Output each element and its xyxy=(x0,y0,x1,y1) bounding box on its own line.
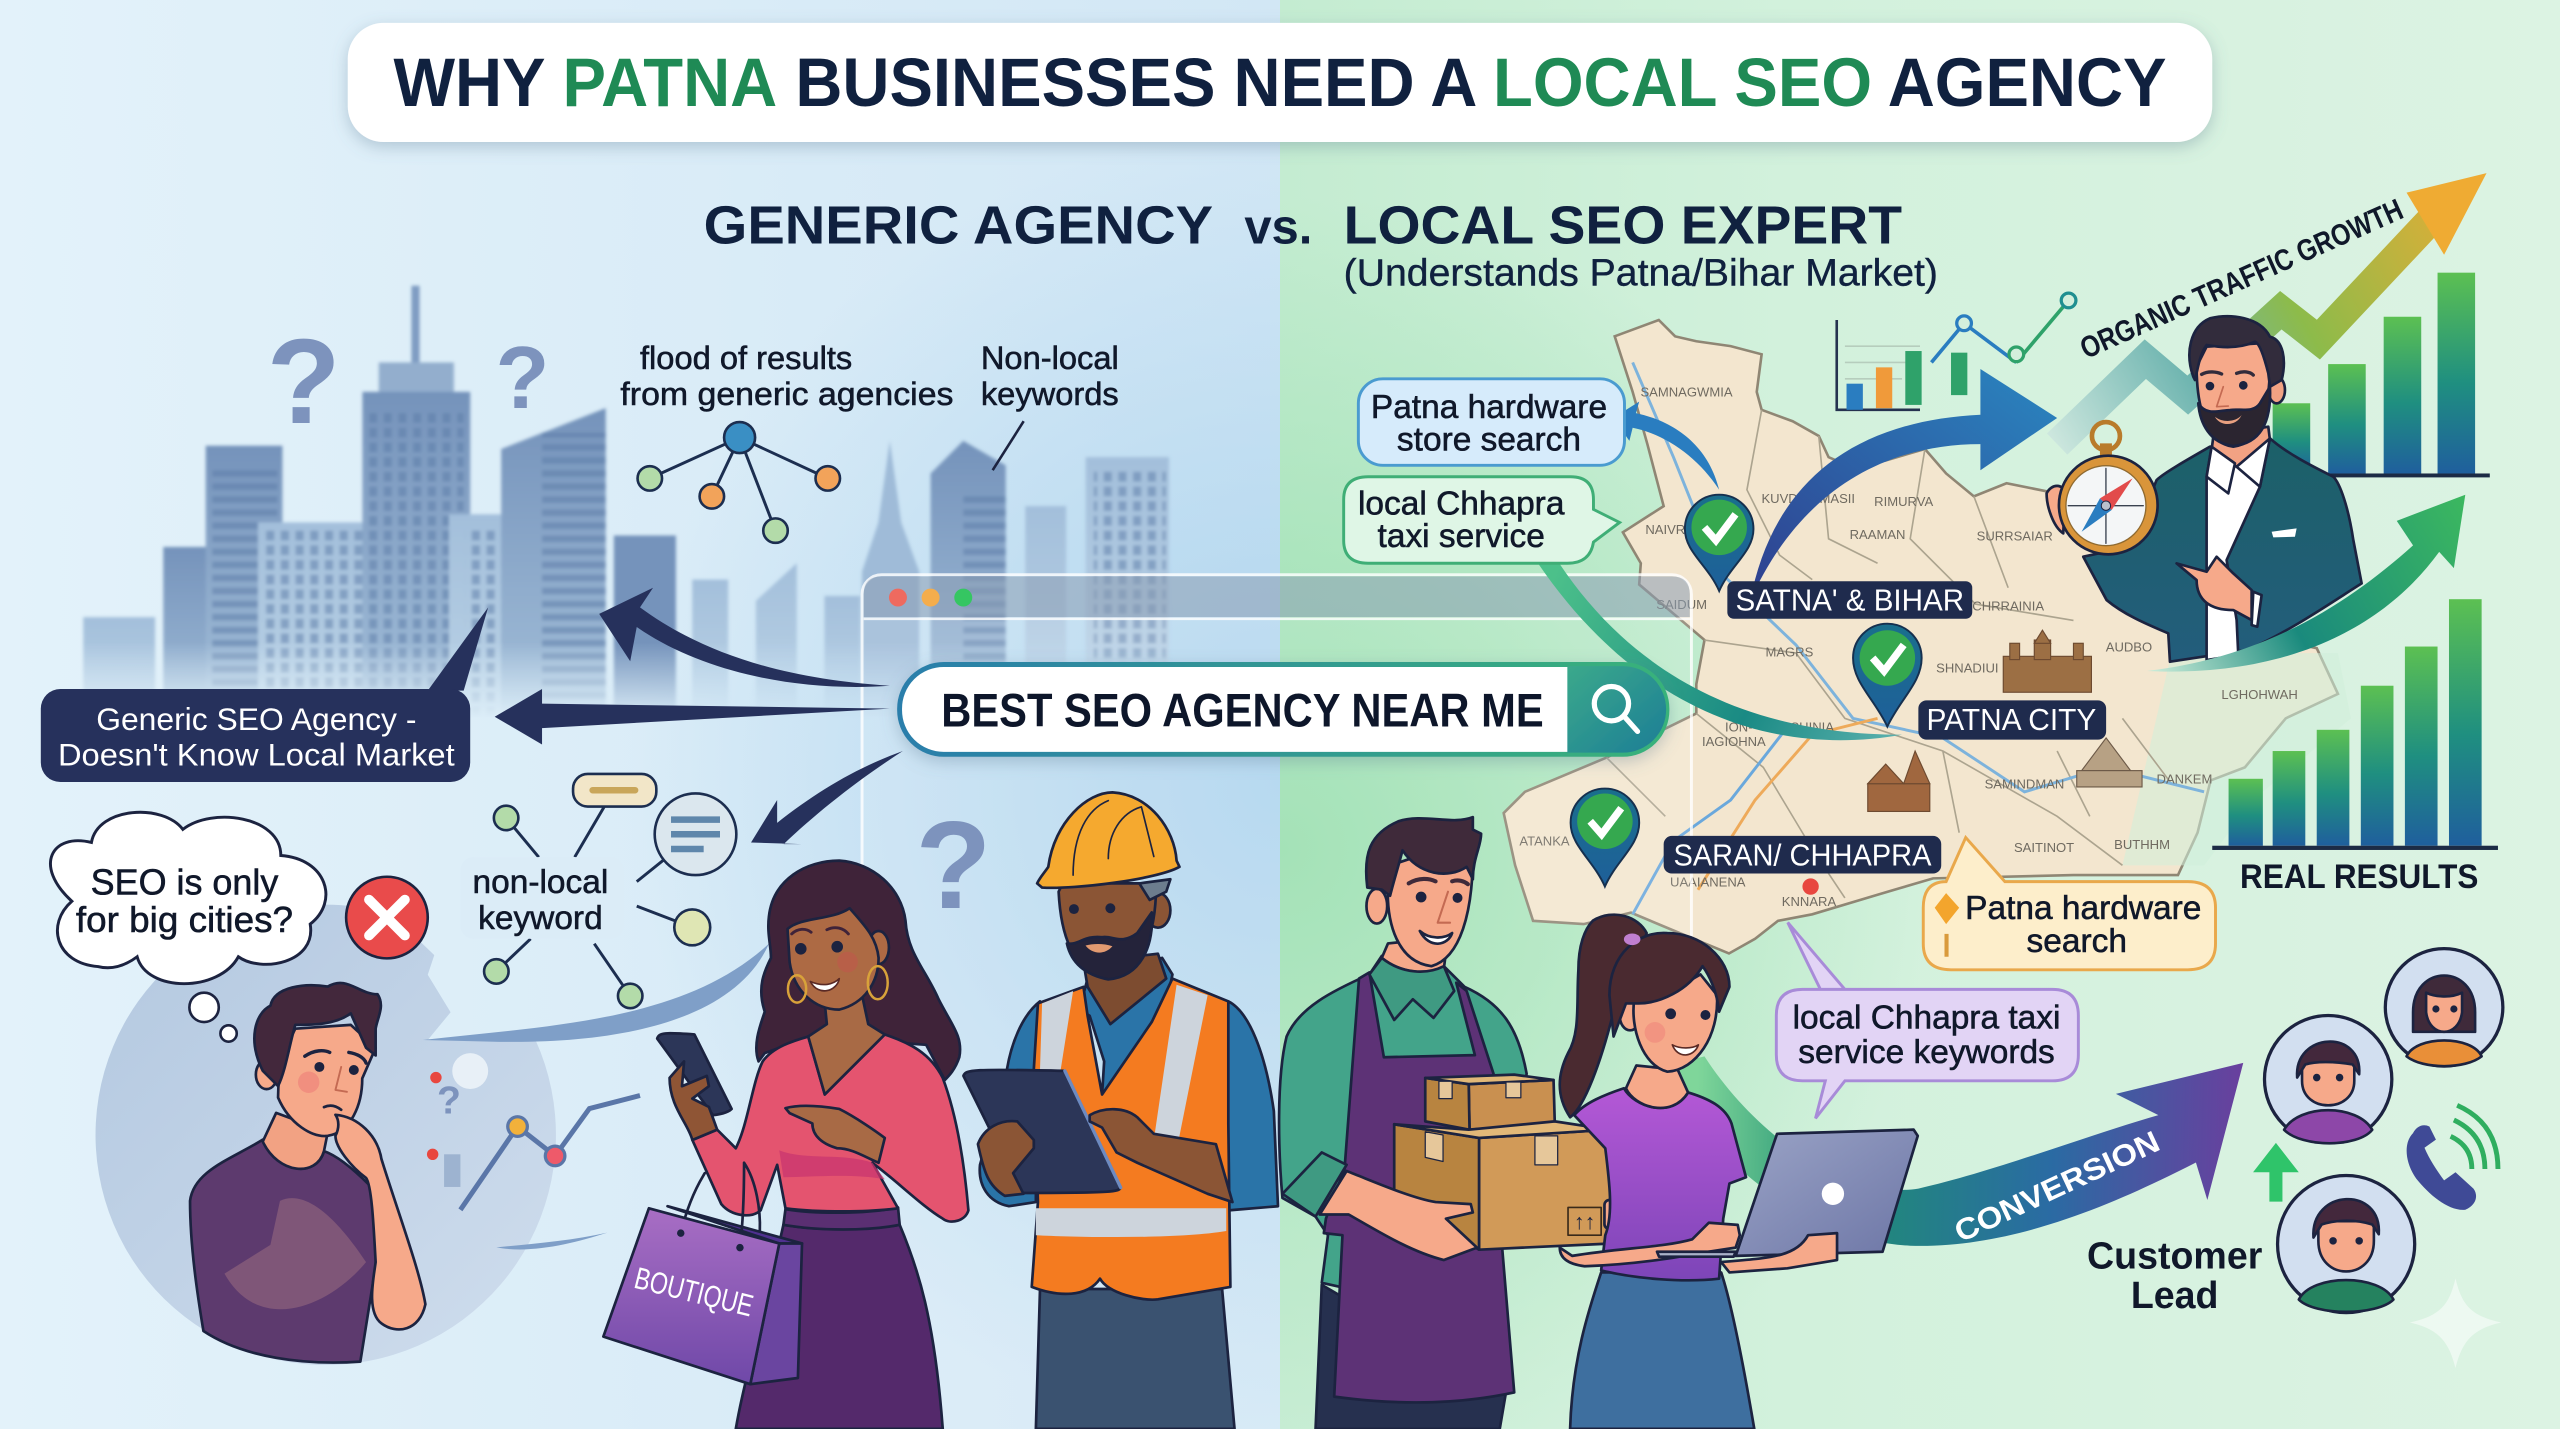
browser window xyxy=(862,575,1691,1429)
conversion arrow: CONVERSION xyxy=(1950,1125,2165,1249)
callout: generic SEO agency: Doesn't Know Local Market xyxy=(58,737,455,773)
background: left blue half xyxy=(0,0,1280,1429)
callout: Patna hardware search xyxy=(1923,838,2216,970)
callout: Patna hardware search: search xyxy=(2027,923,2127,960)
heading: vs: vs. xyxy=(1244,200,1312,254)
map place labels: ION- xyxy=(1725,719,1753,734)
map place labels: UAAIANENA xyxy=(1670,875,1746,890)
rivers and roads xyxy=(1633,362,2204,792)
question mark in browser: ? xyxy=(916,797,991,935)
map place labels: KUVD xyxy=(1761,491,1798,506)
text: flood of results: flood of results xyxy=(640,339,852,376)
callout: local Chhapra taxi service keywords xyxy=(1776,922,2078,1118)
character: woman with phone and bag: BOUTIQUE xyxy=(631,1261,757,1323)
map place labels: RIMURVA xyxy=(1874,494,1933,509)
map place labels: SHINIA xyxy=(1790,719,1834,734)
map place labels: BUTHHM xyxy=(2114,837,2170,852)
map place labels: RAAMAN xyxy=(1850,527,1905,542)
heading: generic agency: GENERIC AGENCY xyxy=(704,195,1213,255)
callout: Patna hardware store search xyxy=(1358,379,1624,465)
map pin: Satna xyxy=(1685,495,1753,591)
arrow: dark arrow to keyword node xyxy=(751,751,903,844)
thought cloud xyxy=(50,812,326,1042)
question mark left: ? xyxy=(267,314,341,449)
big blue arrow to growth chart xyxy=(1750,369,2057,601)
landmark: temple xyxy=(1868,751,1930,811)
label: customer lead: Customer xyxy=(2087,1235,2263,1277)
network diagram: generic agencies xyxy=(638,422,840,543)
small swoosh xyxy=(496,1233,607,1249)
text: non-local keywords: keywords xyxy=(981,375,1119,412)
callout: local Chhapra taxi service xyxy=(1344,477,1620,563)
icon: magnifier xyxy=(1594,687,1638,731)
map place labels: CHRRAINIA xyxy=(1972,599,2044,614)
text: flood of results: from generic agencies xyxy=(620,375,953,412)
label: customer lead xyxy=(2087,1235,2263,1316)
question mark right: ? xyxy=(496,328,549,427)
label: Patna City: PATNA CITY xyxy=(1927,704,2096,737)
subheading: understands market: (Understands Patna/Bihar Market) xyxy=(1344,252,1938,294)
search button xyxy=(1567,666,1666,753)
icon: phone with signal xyxy=(2407,1105,2498,1210)
character: woman with laptop xyxy=(1560,915,1918,1429)
blue arrow to callout xyxy=(1613,402,1719,490)
pointer line xyxy=(993,421,1024,470)
title bar: WHY PATNA BUSINESSES NEED A LOCAL SEO AGENCY xyxy=(393,44,2167,121)
icon: green up arrow xyxy=(2253,1143,2299,1202)
map place labels: AUDBO xyxy=(2106,639,2152,654)
map place labels: JASMASII xyxy=(1796,491,1855,506)
network diagram: non-local keyword: keyword xyxy=(478,900,603,937)
map place labels: KNNARA xyxy=(1782,894,1836,909)
map place labels: SAMNAGWMIA xyxy=(1640,385,1733,400)
district borders xyxy=(1607,410,2171,898)
growth bar chart top xyxy=(2273,273,2490,477)
character: local SEO expert with compass xyxy=(2047,316,2362,662)
declining line chart xyxy=(427,1053,640,1210)
map place labels: IAGIOHNA xyxy=(1702,734,1766,749)
red city marker xyxy=(1802,878,1819,895)
character: shopkeeper with boxes xyxy=(1279,817,1616,1429)
network diagram: non-local keyword xyxy=(460,774,736,1008)
thought cloud: SEO is only xyxy=(91,862,278,903)
blurred city skyline xyxy=(83,286,1169,731)
map place labels: SAIDUM xyxy=(1656,597,1707,612)
label: Saran/Chhapra: SARAN/ CHHAPRA xyxy=(1673,839,1932,872)
text: non-local keywords xyxy=(981,339,1119,412)
green growth arrow xyxy=(2147,495,2465,672)
callout: local Chhapra taxi service: local Chhapra xyxy=(1358,485,1565,522)
swoosh toward worried man xyxy=(423,944,769,1042)
character: woman with phone and bag xyxy=(603,861,968,1429)
search bar xyxy=(900,664,1667,754)
callout: local Chhapra taxi service keywords: service keywords xyxy=(1798,1034,2055,1071)
map of Bihar xyxy=(1504,320,2351,953)
organic traffic zig-zag arrow xyxy=(2057,173,2487,444)
conversion arrow xyxy=(1649,1056,2243,1249)
label: organic traffic growth: ORGANIC TRAFFIC GROWTH xyxy=(2075,193,2408,366)
callout: local Chhapra taxi service keywords: local Chhapra taxi xyxy=(1793,1000,2060,1037)
text: non-local keywords: Non-local xyxy=(981,339,1119,376)
map place labels: LGHOHWAH xyxy=(2221,687,2298,702)
character: construction worker xyxy=(963,792,1278,1429)
green swoosh from callout to Patna xyxy=(1538,563,1902,740)
map pin: Patna xyxy=(1853,624,1922,727)
background: right green half xyxy=(1280,0,2560,1429)
customer avatar: bottom man xyxy=(2278,1176,2415,1313)
arrow: dark arrow to skyline xyxy=(599,588,890,687)
map place labels: ATANKA xyxy=(1519,834,1570,849)
title bar xyxy=(348,23,2212,142)
map place labels: NAIVR xyxy=(1645,522,1685,537)
map place labels: SAMINDMAN xyxy=(1985,777,2064,792)
heading: local SEO expert: LOCAL SEO EXPERT xyxy=(1344,195,1902,255)
character: shopkeeper with boxes: ↑↑ xyxy=(1574,1210,1595,1234)
small bar and line chart xyxy=(1837,293,2076,410)
compass xyxy=(2047,422,2158,554)
map place labels: MAGRS xyxy=(1765,644,1814,659)
callout: generic SEO agency xyxy=(41,607,488,782)
map place labels: SURRSAIAR xyxy=(1977,528,2053,543)
callout: Patna hardware store search: Patna hardware xyxy=(1371,389,1607,426)
icon: red X xyxy=(346,877,428,958)
callout: Patna hardware store search: store search xyxy=(1397,422,1581,459)
landmark: palace xyxy=(2003,630,2091,692)
arrow: dark arrow to generic agency xyxy=(495,689,890,744)
label: Satna and Bihar: SATNA' & BIHAR xyxy=(1736,585,1964,618)
customer avatar: top right woman xyxy=(2385,949,2503,1066)
fading eastern map region xyxy=(2122,653,2351,865)
landmark: stupa xyxy=(2077,738,2142,787)
character: worried man xyxy=(190,983,425,1363)
map place labels: SAITINOT xyxy=(2014,840,2074,855)
label: real results: REAL RESULTS xyxy=(2240,858,2478,896)
declining line chart: ? xyxy=(437,1079,461,1122)
text: flood of results xyxy=(620,339,953,412)
search bar: BEST SEO AGENCY NEAR ME xyxy=(941,685,1544,738)
network diagram: non-local keyword: non-local xyxy=(473,864,608,901)
customer avatar: middle man xyxy=(2264,1016,2392,1143)
map place labels: DANKEM xyxy=(2157,772,2212,787)
callout: Patna hardware search: Patna hardware xyxy=(1965,890,2201,927)
disc behind worried man xyxy=(96,905,556,1365)
map place labels xyxy=(1519,385,2298,909)
map pin: Saran xyxy=(1571,789,1639,887)
real results bar chart xyxy=(2212,599,2498,850)
map place labels: SHNADIUI xyxy=(1936,661,1999,676)
sparkle watermark xyxy=(2410,1278,2501,1368)
label: customer lead: Lead xyxy=(2131,1274,2219,1316)
callout: generic SEO agency: Generic SEO Agency - xyxy=(96,701,416,737)
callout: local Chhapra taxi service: taxi service xyxy=(1378,518,1545,555)
thought cloud: for big cities? xyxy=(76,899,293,940)
